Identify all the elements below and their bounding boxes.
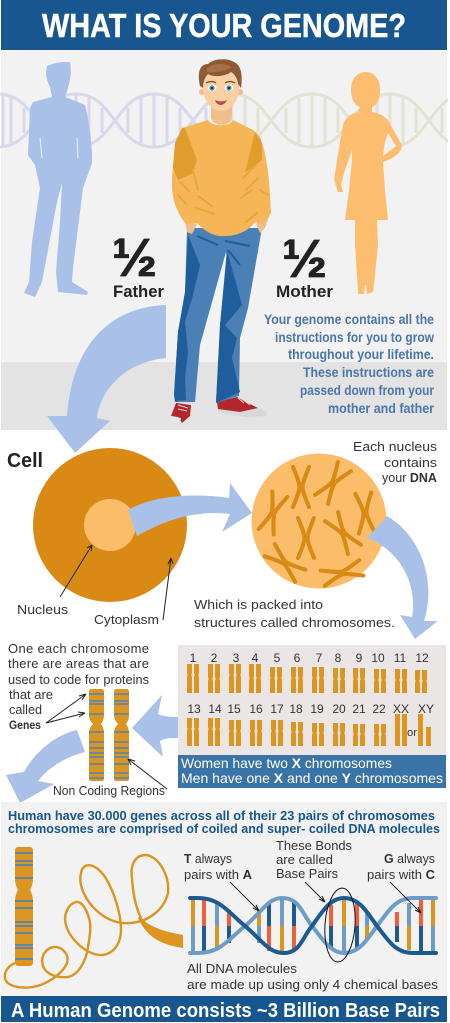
arrow: chromosomes to karyotype xyxy=(367,516,438,639)
text: genes explanation: One each chromosome xyxy=(8,641,149,656)
text: genome description: passed down from your xyxy=(300,383,435,398)
row 2 number labels: 16 xyxy=(249,702,263,716)
text: genome description: throughout your lifetime. xyxy=(288,347,434,362)
heading: 30,000 genes: Human have 30.000 genes across all of their 23 pairs of chromosomes xyxy=(8,809,435,823)
panel: DNA molecules xyxy=(1,802,447,996)
sweater xyxy=(172,120,271,236)
text: four chemical bases: are made up using only 4 chemical bases xyxy=(187,977,439,992)
heading: 30,000 genes xyxy=(8,809,440,836)
row 1 number labels: 7 xyxy=(316,651,323,665)
panel: parents and child background xyxy=(1,50,447,430)
shoes xyxy=(170,397,267,423)
neck xyxy=(211,106,232,125)
row 1 number labels xyxy=(190,651,429,665)
row 1 number labels: 10 xyxy=(371,651,385,665)
text: genes explanation: called xyxy=(9,702,42,717)
base pair ellipse xyxy=(322,887,358,963)
text: four chemical bases: All DNA molecules xyxy=(187,961,298,976)
row 1 number labels: 6 xyxy=(294,651,301,665)
row 2 number labels: 18 xyxy=(289,702,303,716)
row 2 number labels: XY xyxy=(418,702,434,716)
father silhouette xyxy=(24,62,92,297)
pointer: nucleus xyxy=(60,545,92,597)
text: packed into chromosomes xyxy=(194,597,395,630)
row 2 number labels: XX xyxy=(393,702,409,716)
row 2 number labels: 15 xyxy=(227,702,241,716)
fraction: mother half xyxy=(276,229,333,301)
row 2 number labels: 21 xyxy=(352,702,366,716)
pointer: non coding regions xyxy=(128,759,167,789)
label: base pairs: Base Pairs xyxy=(276,866,338,881)
person illustration xyxy=(170,59,271,423)
text: each nucleus contains your DNA xyxy=(353,439,438,485)
row 1 number labels: 11 xyxy=(394,651,407,665)
label: nucleus: Nucleus xyxy=(17,602,69,617)
text: genome description: These instructions are xyxy=(303,365,434,380)
nucleus xyxy=(84,499,136,551)
uncoiling chromosome xyxy=(5,847,183,988)
row 2 number labels: 14 xyxy=(208,702,222,716)
text: genome description: instructions for you to grow xyxy=(275,330,434,345)
pointers: genes xyxy=(46,694,86,723)
row 2 chromosome pairs xyxy=(187,714,431,746)
row 1 number labels: 4 xyxy=(252,651,259,665)
text: each nucleus contains your DNA: your DNA xyxy=(382,470,438,485)
row 2 number labels xyxy=(187,702,434,716)
label: T pairs with A xyxy=(184,851,253,882)
row 2 number labels: 17 xyxy=(270,702,284,716)
label: father: Father xyxy=(113,282,164,301)
DNA double helix xyxy=(190,898,436,953)
label: G pairs with C: G always xyxy=(384,851,435,866)
cell diagram xyxy=(33,448,187,602)
pointers: base pair labels xyxy=(230,882,421,913)
row 1 chromosome pairs xyxy=(187,664,427,693)
row 1 number labels: 2 xyxy=(211,651,218,665)
arrow: father to cell xyxy=(47,305,166,453)
banner: X and Y chromosomes: Men have one X and one Y chromosomes xyxy=(181,770,443,786)
text: packed into chromosomes: Which is packed into xyxy=(194,597,323,612)
text: genes explanation xyxy=(8,641,149,732)
row 2 number labels: 20 xyxy=(332,702,346,716)
text: genome description xyxy=(264,312,435,416)
title banner xyxy=(1,0,447,50)
label: base pairs: are called xyxy=(276,852,333,867)
row 1 number labels: 3 xyxy=(233,651,240,665)
title banner: WHAT IS YOUR GENOME? xyxy=(42,7,406,44)
row 2 number labels: 13 xyxy=(187,702,201,716)
label: non coding regions: Non Coding Regions xyxy=(53,783,165,798)
row 1 number labels: 5 xyxy=(274,651,281,665)
label: G pairs with C xyxy=(367,851,436,882)
enlarged nucleus with chromosomes xyxy=(252,454,386,588)
arrow: nucleus to chromosomes xyxy=(128,483,252,536)
fraction: father half: ½ xyxy=(112,228,157,288)
text: genes explanation: used to code for proteins xyxy=(8,672,149,687)
text: genome description: mother and father xyxy=(328,401,435,416)
text: packed into chromosomes: structures called chromosomes. xyxy=(194,615,395,630)
label: or: or xyxy=(407,727,417,739)
heading: 30,000 genes: chromosomes are comprised of coiled and super- coiled DNA molecules xyxy=(8,822,440,836)
text: genes explanation: there are areas that are xyxy=(8,656,149,671)
arrow: chromosome to DNA xyxy=(6,730,85,803)
hands xyxy=(185,214,270,234)
pointer: cytoplasm xyxy=(163,558,173,620)
row 1 number labels: 12 xyxy=(415,651,429,665)
background DNA helix xyxy=(0,94,450,147)
panel: karyotype chromosomes xyxy=(178,645,446,755)
text: genome description: Your genome contains all the xyxy=(264,312,434,327)
text: four chemical bases xyxy=(187,961,439,992)
arrow: karyotype to chromosome xyxy=(132,695,178,757)
label: G pairs with C: pairs with C xyxy=(367,867,436,882)
jeans xyxy=(174,228,262,403)
label: base pairs xyxy=(276,838,352,881)
row 1 number labels: 8 xyxy=(335,651,342,665)
text: each nucleus contains your DNA: contains xyxy=(384,455,438,470)
head xyxy=(199,59,243,111)
label: base pairs: These Bonds xyxy=(276,838,352,853)
label: T pairs with A: pairs with A xyxy=(184,867,253,882)
heading: cell: Cell xyxy=(7,450,43,472)
chromosome pair with gene bands xyxy=(89,689,129,781)
label: cytoplasm: Cytoplasm xyxy=(94,612,159,627)
fraction: mother half: ½ xyxy=(282,229,327,289)
label: mother: Mother xyxy=(276,282,333,301)
text: genes explanation: that are xyxy=(9,687,53,702)
row 2 number labels: 22 xyxy=(372,702,386,716)
row 2 number labels: 19 xyxy=(310,702,324,716)
row 1 number labels: 1 xyxy=(190,651,197,665)
mother silhouette xyxy=(334,72,402,294)
text: genes explanation: Genes xyxy=(9,718,41,732)
label: T pairs with A: T always xyxy=(184,851,232,866)
row 1 number labels: 9 xyxy=(356,651,363,665)
banner: X and Y chromosomes xyxy=(178,755,446,788)
text: each nucleus contains your DNA: Each nucleus xyxy=(353,439,438,454)
banner: X and Y chromosomes: Women have two X chromosomes xyxy=(181,755,392,771)
